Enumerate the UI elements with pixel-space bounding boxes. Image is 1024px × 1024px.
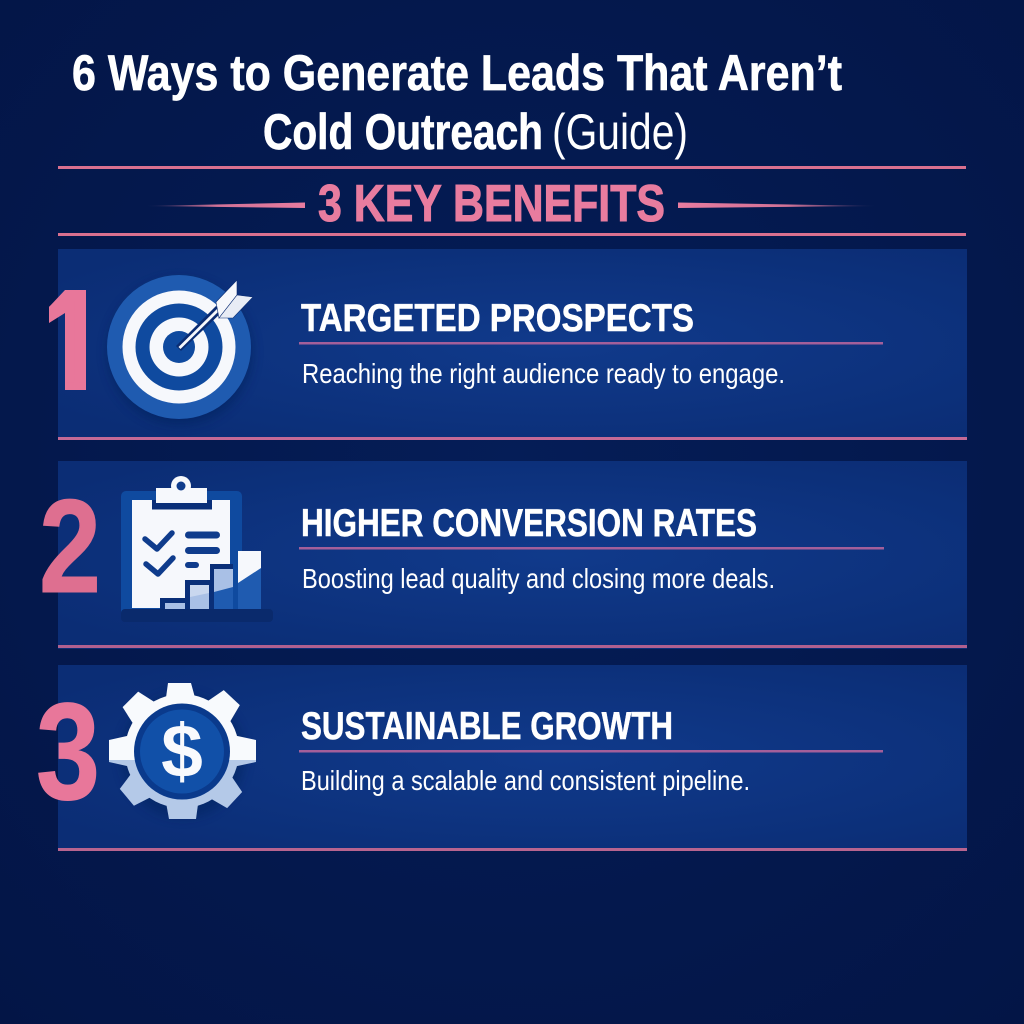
- heading and description: [299, 297, 883, 389]
- icon: gear with dollar: [109, 683, 256, 819]
- number 2: 2: [39, 473, 101, 621]
- section heading: 3 key benefits: 3 KEY BENEFITS: [318, 175, 665, 233]
- title: 6 Ways to Generate Leads That Aren’t: [72, 45, 842, 101]
- heading and description: Building a scalable and consistent pipeline.: [301, 765, 750, 796]
- title: (Guide): [552, 104, 688, 160]
- number 1: 1: [35, 263, 113, 420]
- title: [72, 45, 842, 160]
- panel: higher conversion rates: [39, 461, 967, 649]
- icon: gear with dollar: $: [161, 709, 203, 793]
- heading and description: Reaching the right audience ready to engage.: [302, 358, 785, 389]
- panel: targeted prospects: [35, 249, 967, 440]
- heading and description: TARGETED PROSPECTS: [301, 297, 694, 340]
- heading and description: Boosting lead quality and closing more deals.: [302, 563, 775, 594]
- title: Cold Outreach: [263, 104, 543, 160]
- icon: clipboard with bars: [121, 476, 273, 622]
- icon: target with arrow: [107, 275, 253, 425]
- heading and description: [299, 502, 884, 594]
- number 3: 3: [36, 675, 100, 829]
- panel: sustainable growth: [36, 665, 967, 851]
- heading and description: HIGHER CONVERSION RATES: [301, 502, 757, 545]
- heading and description: SUSTAINABLE GROWTH: [301, 705, 673, 748]
- section heading: 3 key benefits: [58, 166, 966, 236]
- heading and description: [299, 705, 883, 796]
